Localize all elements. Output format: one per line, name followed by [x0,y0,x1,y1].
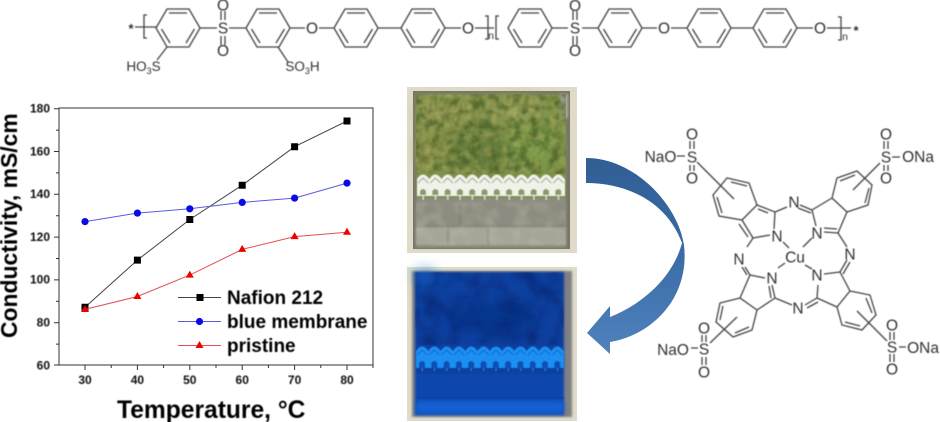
ring 5 [508,9,552,47]
complex labels: NaO [645,149,676,166]
y axis tick labels: 100 [30,273,50,287]
polymer labels: S [218,20,228,38]
y axis tick labels: 160 [30,144,50,158]
series: Nafion 212 [82,118,350,311]
complex labels: O [880,170,892,188]
x axis tick labels: 80 [340,373,354,387]
ring 6 [598,9,642,47]
polymer labels: SO [285,59,305,74]
polymer labels: O [462,20,474,38]
y axis tick labels: 60 [37,358,50,372]
polymer structure [126,0,859,76]
top right isoindole [798,171,872,233]
complex labels: N [733,252,745,268]
polymer labels: O [658,20,670,38]
complex labels: O [880,126,892,144]
polymer labels: HO [126,59,147,74]
x axis tick labels: 40 [131,373,144,387]
sulfonate bottom left [691,317,737,365]
y axis tick labels: 140 [30,187,50,201]
polymer labels: O [306,20,318,38]
complex labels: N [811,268,823,284]
polymer bonds and brackets [135,11,851,62]
complex labels: O [886,318,898,334]
complex labels: O [886,362,898,378]
ring 8 [753,9,797,47]
legend: blue membrane [227,312,367,333]
polymer labels: O [814,20,826,38]
ring 1 [156,9,200,47]
y axis tick labels: 120 [30,230,50,244]
polymer labels: n [842,31,848,43]
polymer labels: O [569,43,581,60]
polymer labels [126,0,859,76]
polymer labels: 3 [147,66,152,76]
y axis tick labels [30,102,50,372]
x axis tick labels: 70 [288,373,302,387]
complex labels: O [698,320,710,338]
photo: pristine membrane [407,87,577,253]
series: blue membrane [81,180,351,225]
complex labels: N [766,270,778,288]
complex labels: N [788,194,800,212]
polymer labels: * [853,23,859,38]
complex labels: Cu [785,250,805,266]
sulfonate top left [677,141,734,199]
polymer labels: S [570,20,580,38]
polymer labels: O [217,43,229,60]
complex labels: ONa [907,340,939,357]
sulfonate bottom right [857,311,906,362]
ring 7 [687,9,731,47]
y axis tick labels: 80 [37,316,50,330]
y axis tick labels: 180 [30,102,50,116]
polymer labels: 3 [305,66,310,76]
photo: blue membrane [407,267,577,421]
sulfonate top right [853,141,900,190]
ring 3 [334,9,378,47]
polymer labels: H [310,59,320,74]
bottom left isoindole [716,267,792,337]
x axis tick labels [78,373,354,387]
complex labels: O [686,126,698,144]
complex labels: ONa [902,149,934,166]
x axis tick labels: 30 [78,373,92,387]
complex labels: NaO [657,342,689,359]
ring 2 [246,9,290,47]
copper phthalocyanine structure [645,126,939,382]
top left isoindole [713,178,787,238]
bottom right isoindole [805,260,876,330]
plot frame and ticks [54,108,373,370]
complex labels: O [698,364,710,382]
complex labels: N [811,226,823,242]
complex labels [645,126,939,382]
complex labels: N [792,300,804,318]
complex labels: N [844,246,856,264]
legend [178,288,367,357]
polymer labels: S [152,59,161,74]
complex labels: N [771,228,783,246]
arrow: curved from top photo to bottom photo [586,158,685,354]
copper bonds [747,233,847,269]
complex labels: S [687,150,697,166]
complex labels: S [699,342,709,358]
complex labels: S [881,150,891,166]
polymer labels: * [128,21,134,36]
legend: Nafion 212 [227,288,323,309]
series: pristine [81,228,351,312]
x axis tick labels: 60 [236,373,249,387]
complex labels: O [686,170,698,188]
complex labels: S [887,340,897,356]
legend: pristine [227,336,296,357]
polymer labels: n [488,30,494,42]
line chart: conductivity vs temperature [0,102,373,422]
x axis tick labels: 50 [183,373,197,387]
ring 4 [401,9,445,47]
